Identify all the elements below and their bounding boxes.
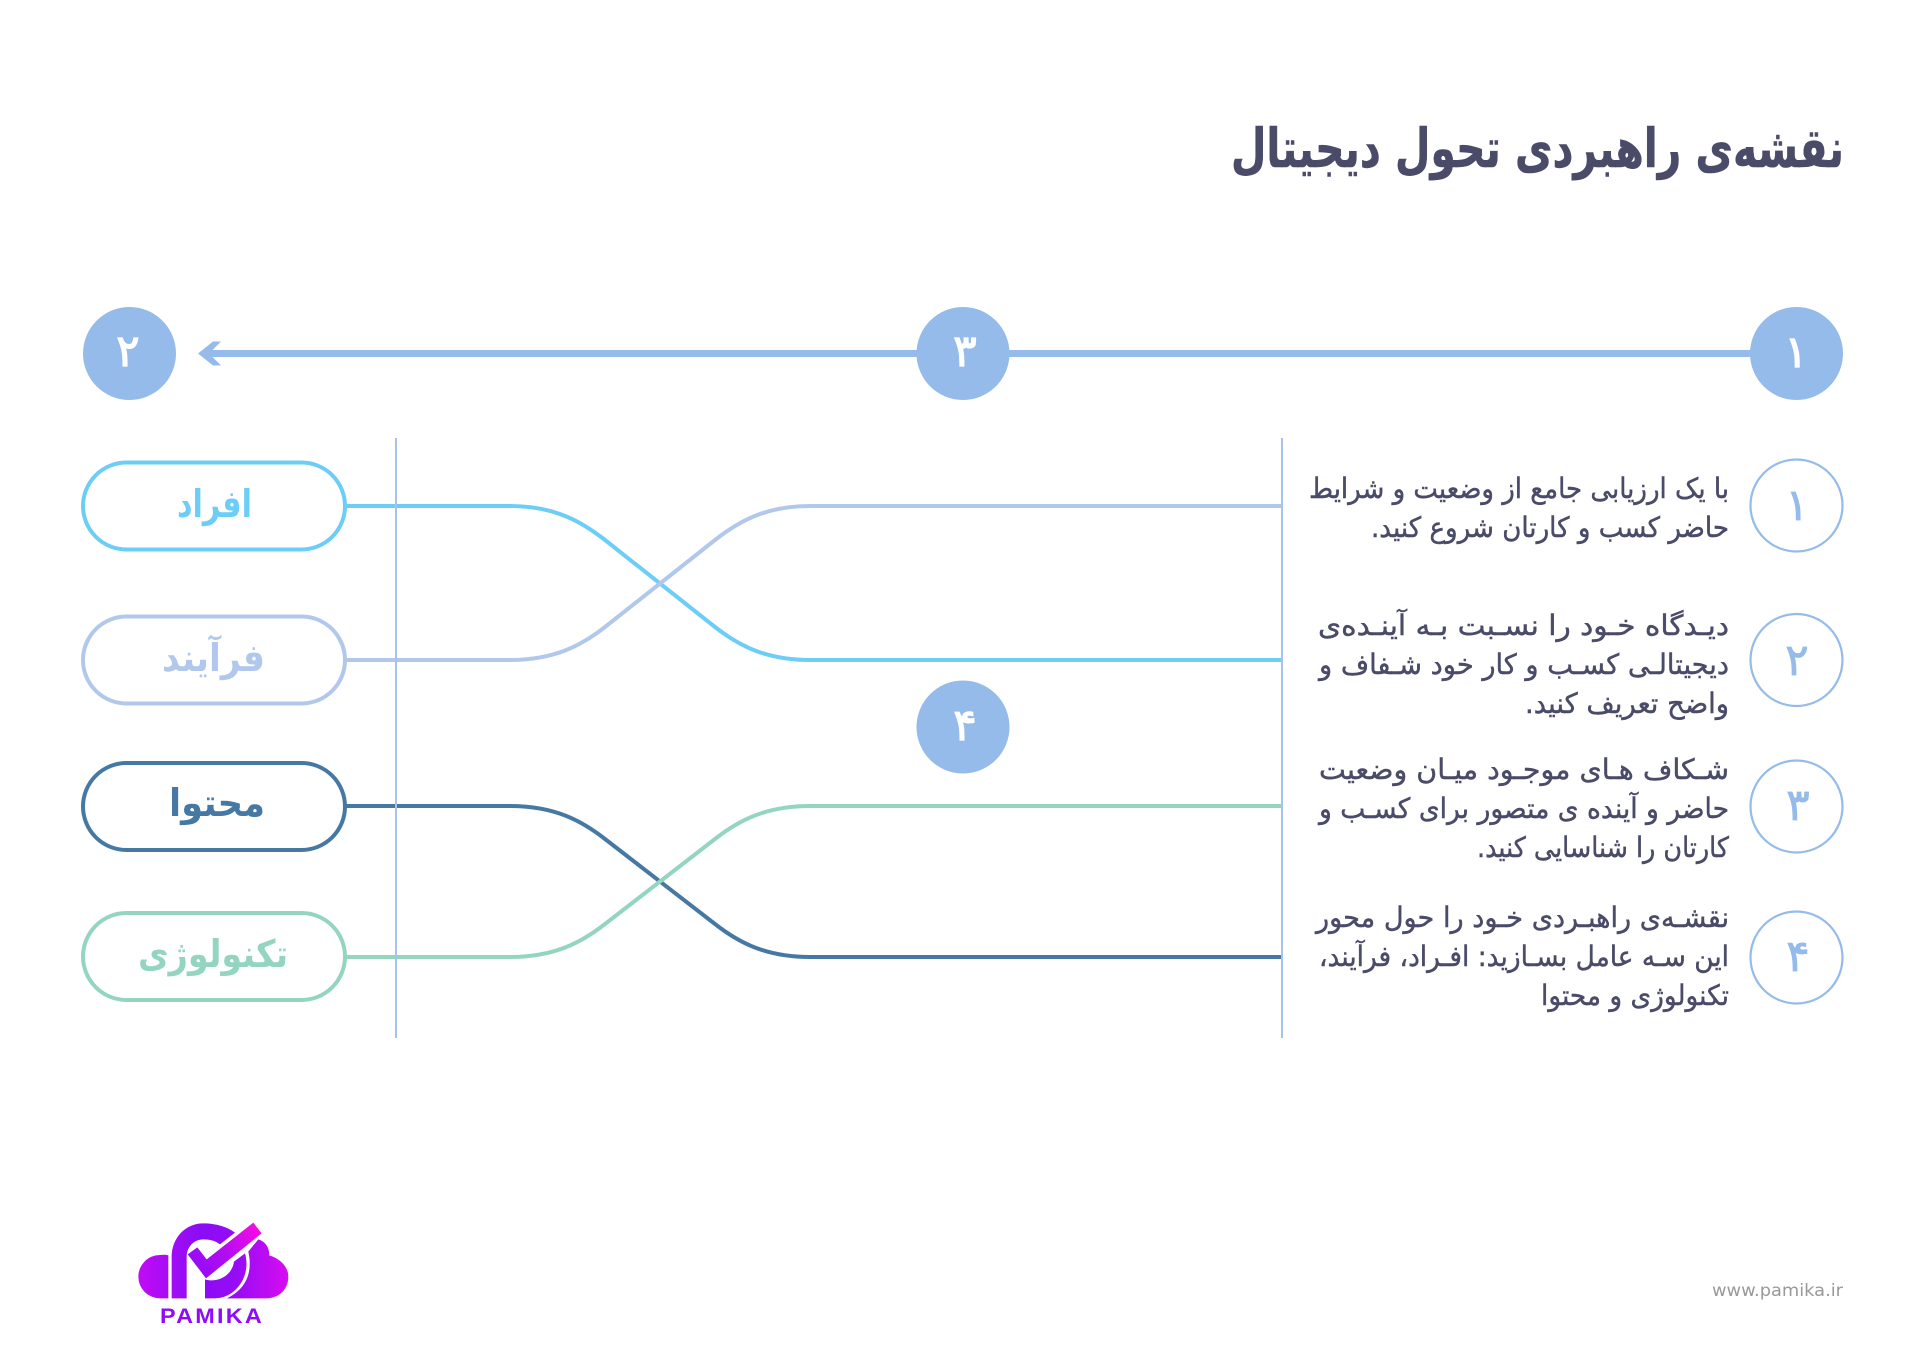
- connector: process: [346, 506, 1282, 660]
- text block 2: دیـدگاه خـود را نسـبت بـه آینـده‌ی: [1318, 609, 1729, 642]
- text block 1: با یک ارزیابی جامع از وضعیت و شرایط: [1309, 472, 1729, 505]
- logo: Pamika: PAMIKA: [160, 1305, 264, 1328]
- numbered circle 2: [1750, 614, 1842, 706]
- pill: process: [83, 616, 345, 704]
- numbered circle 3: [1750, 760, 1842, 852]
- numbered circle 2: ۲: [1785, 635, 1809, 686]
- pill: technology: تکنولوژی: [138, 932, 288, 976]
- text block 3: حاضر و آینده ی متصور برای کسـب و: [1317, 792, 1729, 825]
- step 4 badge: ۴: [953, 700, 977, 751]
- connector: people: [346, 506, 1282, 660]
- text block 2: [1317, 609, 1729, 720]
- text block 1: [1309, 472, 1729, 544]
- left vertical rule: [395, 438, 397, 1038]
- numbered circle 4: [1750, 912, 1842, 1004]
- connector: technology: [346, 806, 1282, 957]
- numbered circle 3: ۳: [1786, 780, 1810, 831]
- right vertical rule: [1281, 438, 1283, 1038]
- numbered circle 4: ۴: [1786, 931, 1810, 982]
- timeline step 1: [1750, 307, 1843, 400]
- pill: content: محتوا: [169, 781, 265, 825]
- logo: Pamika: [138, 1223, 288, 1328]
- text block 2: دیجیتالـی کسـب و کار خود شـفاف و: [1317, 648, 1729, 681]
- timeline arrow: [198, 342, 1765, 366]
- pill: technology: [83, 913, 345, 1000]
- timeline step 1: ۱: [1784, 327, 1808, 378]
- pill: people: افراد: [177, 482, 252, 526]
- text block 1: حاضر کسب و کارتان شروع کنید.: [1371, 511, 1729, 544]
- pill: people: [83, 462, 345, 550]
- numbered circle 1: [1750, 460, 1842, 552]
- timeline step 3: ۳: [953, 326, 977, 377]
- text block 2: واضح تعریف کنید.: [1525, 687, 1729, 720]
- website url: www.pamika.ir: [1712, 1281, 1843, 1301]
- text block 4: نقشـه‌ی راهبـردی خـود را حول محور: [1314, 901, 1729, 934]
- connector: content: [346, 806, 1282, 957]
- timeline step 3: [916, 307, 1010, 400]
- text block 4: تکنولوژی و محتوا: [1541, 979, 1729, 1012]
- step 4 badge: [916, 680, 1010, 774]
- text block 4: [1314, 901, 1729, 1012]
- pill: content: [83, 763, 345, 850]
- timeline step 2: [83, 307, 176, 400]
- timeline step 2: ۲: [116, 326, 140, 377]
- text block 3: کارتان را شناسایی کنید.: [1477, 831, 1730, 864]
- pill: process: فرآیند: [162, 634, 265, 680]
- numbered circle 1: ۱: [1785, 480, 1809, 531]
- text block 3: [1317, 753, 1730, 864]
- text block 4: این سـه عامل بسـازید: افـراد، فرآیند،: [1319, 940, 1729, 973]
- text block 3: شـکاف هـای موجـود میـان وضعیت: [1319, 753, 1729, 786]
